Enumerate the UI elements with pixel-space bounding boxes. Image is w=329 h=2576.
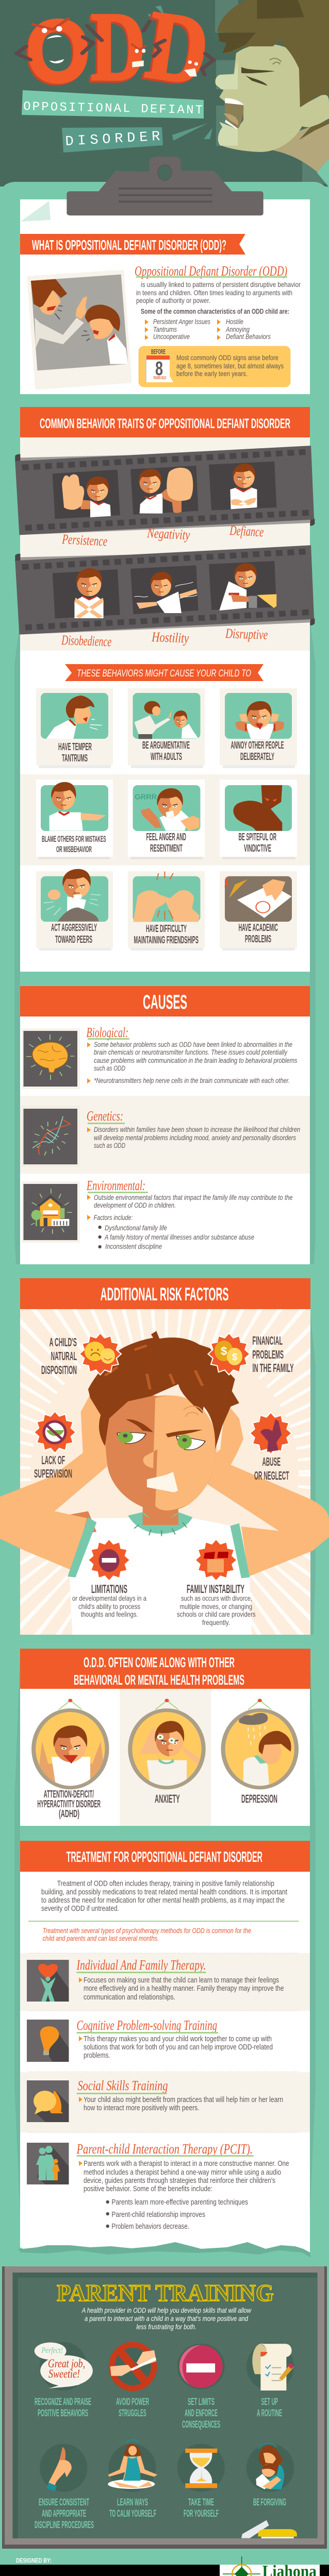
title: ODD letters — [23, 0, 215, 108]
title: ODD letters: O — [23, 3, 90, 104]
therapy: parent-child interaction — [27, 2141, 289, 2231]
scene: disruptive — [219, 563, 276, 611]
cause: environmental: Environmental: — [86, 1178, 145, 1193]
paper: what is ODD — [20, 199, 310, 394]
callout text — [43, 1926, 251, 1942]
risk: limitations: or developmental delays in a — [72, 1594, 146, 1602]
card: blame others: BLAME OTHERS FOR MISTAKES — [42, 834, 106, 844]
cause: environmental: development of ODD in children. — [94, 1201, 176, 1209]
trait labels: Hostility — [151, 629, 189, 646]
tip: power struggles — [109, 2342, 157, 2419]
tip: discipline — [35, 2444, 94, 2531]
panel: parent training chalkboard: DISCIPLINE PROCEDURES — [35, 2520, 94, 2531]
tip: set limits: SET LIMITS — [188, 2397, 215, 2408]
card: anger and resentment: GRRR — [135, 793, 157, 802]
therapy: individual and family — [27, 1957, 284, 2002]
panel: treatment — [20, 1841, 310, 2252]
icon: happy and sad faces — [85, 1342, 115, 1364]
callout text: Treatment with several types of psychotherapy methods for ODD is common for the — [43, 1926, 251, 1935]
characteristics list — [145, 317, 271, 341]
banner: Oppositional Defiant — [22, 90, 204, 118]
intro text: severity of ODD if untreated. — [41, 1904, 119, 1913]
heading: CAUSES — [143, 991, 187, 1013]
trait labels — [61, 522, 268, 649]
portrait: anxiety — [128, 1699, 206, 1791]
characteristics list: Persistent Anger Issues — [153, 317, 210, 326]
icon: DNA — [22, 1106, 80, 1167]
risk: limitations: thoughts and feelings. — [81, 1610, 138, 1618]
intro text — [41, 1879, 288, 1913]
risk: family instability: such as occurs with divorce, — [181, 1594, 252, 1602]
card: anger and resentment — [128, 779, 205, 859]
icon: calendar: YEARS OLD — [153, 376, 166, 380]
card: anger and resentment: FEEL ANGER AND — [146, 832, 186, 843]
heading — [20, 1649, 310, 1689]
icon: mother hugging child — [246, 2444, 294, 2492]
card: friendships — [128, 871, 205, 951]
banner: Disorder: DISORDER — [65, 129, 160, 150]
card: aggressive: ACT AGGRESSIVELY — [51, 922, 97, 934]
tip: set limits: AND ENFORCE — [185, 2408, 218, 2419]
definition text — [136, 280, 301, 315]
trait labels: Negativity — [146, 525, 190, 543]
intro text: Treatment of ODD often includes therapy, training in positive family relationship — [57, 1879, 274, 1888]
callout: before age 8: age 8, sometimes later, but almost always — [176, 362, 284, 370]
tip: discipline: AND APPROPRIATE — [42, 2509, 86, 2519]
therapy: social skills — [27, 2078, 283, 2122]
therapy: parent-child interaction: Parents learn more-effective parenting techniques — [111, 2198, 248, 2207]
icon: no tug of war — [109, 2342, 157, 2391]
trait labels: Disobedience — [61, 632, 112, 649]
icon: stop sign — [177, 2344, 225, 2389]
cause: environmental: A family history of mental illnesses and/or substance abuse — [104, 1233, 254, 1241]
risk: limitations: child's ability to process — [78, 1602, 140, 1611]
heading — [20, 407, 310, 437]
scene: defiance — [230, 464, 257, 509]
card: temper tantrums — [36, 688, 113, 768]
card: argumentative: BE ARGUMENTATIVE — [142, 740, 190, 751]
icon: speech bubbles: Great job, — [48, 2357, 85, 2370]
heading — [20, 986, 310, 1016]
scene: disobedience — [74, 568, 104, 618]
tip: routine — [246, 2343, 294, 2419]
icon: hourglass — [177, 2444, 225, 2492]
icon: house — [22, 1181, 80, 1243]
tip: praise — [35, 2342, 93, 2419]
card: aggressive — [36, 869, 113, 951]
therapy: parent-child interaction: method includes a therapist behind a one-way mirror while using a audio — [84, 2168, 281, 2177]
characteristics list: Hostile — [226, 317, 243, 326]
definition text: in teens and children. Often times leading to arguments with — [136, 289, 292, 297]
risk: limitations: LIMITATIONS — [91, 1582, 127, 1596]
cause: genetics: such as ODD — [94, 1141, 125, 1149]
therapy: cognitive problem-solving: This therapy makes you and your child work together to come up with — [84, 2035, 272, 2043]
risk: financial problems: PROBLEMS — [252, 1348, 284, 1361]
characteristics list: Uncooperative — [153, 332, 190, 341]
icon: no entry — [99, 1549, 120, 1572]
trait labels: Disruptive — [225, 625, 268, 642]
intro text: less frustrating for both. — [136, 2323, 196, 2331]
tip: set limits — [177, 2344, 225, 2430]
risk: natural disposition — [41, 1332, 122, 1377]
card: academic problems: HAVE ACADEMIC — [238, 922, 278, 934]
icon: pointing finger — [40, 2444, 87, 2492]
tip: take time: TAKE TIME — [188, 2497, 214, 2508]
cause: environmental: Dysfunctional family life — [105, 1224, 167, 1232]
label: ADHD: ATTENTION-DEFICIT/ — [44, 1789, 94, 1800]
panel: causes — [20, 986, 310, 1264]
margin shadows — [14, 618, 316, 2215]
icon: calendar: 8 — [155, 358, 163, 380]
risk: family instability: frequently. — [202, 1618, 230, 1626]
label: ADHD — [37, 1789, 101, 1820]
card: temper tantrums: TANTRUMS — [62, 753, 88, 764]
panel: parent training chalkboard: RECOGNIZE AND PRAISE — [35, 2397, 91, 2408]
characteristics list: Tantrums — [153, 325, 177, 333]
risk: abuse or neglect: ABUSE — [262, 1455, 281, 1468]
icon: calendar — [145, 348, 173, 382]
therapy: cognitive problem-solving: Cognitive Problem-solving Training — [76, 2018, 217, 2033]
therapy: parent-child interaction: device, guides parents through strategies that reinforce their children's — [84, 2176, 275, 2185]
label: ADHD: (ADHD) — [59, 1808, 79, 1820]
therapy: parent-child interaction: Parent-child relationship improves — [111, 2210, 205, 2219]
card: spiteful: VINDICTIVE — [244, 843, 271, 854]
tip: discipline: ENSURE CONSISTENT — [39, 2497, 89, 2508]
therapy: cognitive problem-solving — [27, 2018, 273, 2062]
risk: family instability: FAMILY INSTABILITY — [187, 1582, 244, 1596]
ODD faces and limbs — [17, 18, 213, 76]
callout: before age 8: Most commonly ODD signs arise before — [176, 353, 278, 362]
risk: family instability — [177, 1540, 256, 1626]
ribbon heading — [65, 664, 264, 681]
cause: biological: such as ODD — [94, 1064, 125, 1072]
card: friendships: HAVE DIFFICULTY — [146, 923, 187, 935]
risk: family instability: schools or child care providers — [177, 1610, 256, 1618]
panel: additional risk factors — [0, 1278, 329, 1635]
card: academic problems — [220, 871, 297, 951]
icon: speech bubbles: Sweetie! — [48, 2367, 80, 2380]
icon: broken house — [204, 1552, 228, 1572]
icon: speech bubbles: Perfect! — [41, 2346, 63, 2355]
scene: negativity — [139, 468, 193, 514]
scene: hostility — [134, 572, 197, 613]
tip: be forgiving — [246, 2444, 294, 2508]
risk: lack of supervision: SUPERVISION — [34, 1467, 72, 1480]
card: annoy others — [220, 688, 297, 768]
icon: coins: $ — [232, 1352, 237, 1362]
therapy: social skills: how to interact more positively with peers. — [84, 2104, 199, 2112]
tip: routine: SET UP — [261, 2397, 278, 2408]
tip: take time — [177, 2444, 225, 2519]
risk: financial problems: FINANCIAL — [252, 1334, 283, 1347]
risk: natural disposition: NATURAL — [51, 1349, 77, 1363]
tip: power struggles: AVOID POWER — [116, 2397, 149, 2408]
panel: comorbid problems: HYPERACTIVITY DISORDER — [37, 1799, 101, 1810]
trait labels: Defiance — [229, 522, 264, 539]
illustration: boy covering ears — [0, 1331, 329, 1635]
tip: power struggles: STRUGGLES — [119, 2408, 146, 2419]
risk: abuse or neglect — [249, 1412, 292, 1482]
card: argumentative: WITH ADULTS — [151, 751, 182, 762]
cause: genetics: Genetics: — [87, 1108, 123, 1124]
tip: set limits: CONSEQUENCES — [182, 2419, 220, 2430]
portrait: depression — [221, 1699, 299, 1791]
risk: financial problems — [207, 1332, 294, 1376]
icon: meditating woman — [108, 2439, 157, 2492]
clipboard board — [0, 182, 329, 247]
icon: heart and person — [27, 1960, 69, 2002]
risk: lack of supervision — [33, 1411, 77, 1480]
panel: comorbid problems: DEPRESSION — [241, 1792, 277, 1805]
risk: limitations — [72, 1540, 146, 1618]
callout: before age 8: before the early teen years. — [176, 369, 248, 378]
card: academic problems: PROBLEMS — [245, 934, 271, 945]
therapy: parent-child interaction: Problem behaviors decrease. — [111, 2222, 189, 2231]
characteristics list: Annoying — [225, 325, 250, 333]
icon: crossed eye — [44, 1421, 65, 1443]
icon: coins: $ — [221, 1345, 227, 1358]
callout text: child and parents and can last several months. — [43, 1934, 159, 1942]
icon: light bulb — [27, 2020, 69, 2062]
card: blame others — [36, 779, 113, 859]
tip: routine: A ROUTINE — [257, 2408, 282, 2419]
icon: calendar: BEFORE — [151, 348, 166, 355]
icon: family — [27, 2143, 69, 2184]
therapy: parent-child interaction: Parent-child Interaction Therapy (PCIT). — [76, 2141, 253, 2157]
risk: natural disposition: A CHILD'S — [50, 1335, 77, 1349]
logo: Liahona Academy — [220, 2556, 320, 2576]
film strip 1 — [15, 446, 315, 535]
label: anxiety: ANXIETY — [155, 1792, 180, 1805]
card: blame others: OR MISBEHAVIOR — [56, 844, 92, 854]
intro text: a parent to interact with a child in a way that's more positive and — [85, 2314, 249, 2323]
intro text: A health provider in ODD will help you develop skills that will allow — [81, 2306, 252, 2314]
card: spiteful: BE SPITEFUL OR — [238, 832, 276, 843]
icon: notepad — [246, 2343, 294, 2391]
therapy: cognitive problem-solving: problems. — [84, 2051, 110, 2060]
characteristics list: Defiant Behaviors — [226, 332, 271, 341]
heading — [20, 1278, 310, 1309]
card: friendships: MAINTAINING FRIENDSHIPS — [134, 935, 199, 946]
panel: common behavior traits — [15, 407, 315, 651]
card: aggressive: TOWARD PEERS — [55, 934, 92, 945]
card: temper tantrums: HAVE TEMPER — [58, 741, 92, 753]
panel: parent training chalkboard: TO CALM YOURSELF — [109, 2509, 156, 2519]
cause: biological: Biological: — [87, 1025, 128, 1040]
footer black area — [0, 2565, 329, 2576]
icon: brain — [22, 1028, 80, 1089]
card: annoy others: DELIBERATELY — [240, 751, 274, 762]
risk: family instability: multiple moves, or changing — [180, 1602, 252, 1611]
definition text: people of authority or power. — [136, 296, 210, 304]
therapy: individual and family: Individual And Family Therapy. — [76, 1957, 206, 1973]
risk: natural disposition: DISPOSITION — [41, 1363, 77, 1377]
title: ODD letters: O — [24, 1, 92, 102]
torn paper shadow — [18, 2242, 311, 2258]
therapy: individual and family: Focuses on making sure that the child can learn to manage their feelings — [84, 1976, 279, 1985]
definition text: is usuallly linked to patterns of persistent disruptive behavior — [141, 280, 301, 289]
panel: parent training chalkboard — [2, 2266, 327, 2549]
therapy: cognitive problem-solving: solutions that work for both of you and can help improve ODD-related — [84, 2043, 273, 2052]
tip: take time: FOR YOURSELF — [184, 2509, 219, 2519]
triangles: shout marks — [148, 6, 212, 141]
polaroid: mother scolding child — [27, 269, 132, 390]
cause: genetics — [22, 1106, 300, 1167]
portrait: ADHD — [31, 1699, 109, 1791]
label: designed by: DESIGNED BY: — [16, 2558, 52, 2564]
banner: Oppositional Defiant: OPPOSITIONAL DEFIANT — [23, 100, 203, 117]
cause: environmental: Factors include: — [94, 1213, 133, 1222]
card: anger and resentment: RESENTMENT — [150, 843, 183, 854]
therapy: parent-child interaction: positive behavior. Some of the benefits include: — [84, 2184, 212, 2193]
cause: environmental: Inconsistent discipline — [105, 1242, 162, 1250]
icon: speech bubbles — [35, 2342, 93, 2391]
cause: biological — [22, 1025, 297, 1089]
tip: praise: POSITIVE BEHAVIORS — [38, 2408, 88, 2419]
tip: calm — [108, 2439, 157, 2519]
heading — [20, 1841, 310, 1872]
hero panel — [0, 0, 329, 187]
therapy: social skills: Your child also might benefit from practices that will help him or her learn — [84, 2095, 283, 2104]
illustration: shouting boy — [215, 0, 329, 187]
cause: environmental — [22, 1178, 293, 1250]
ribbon heading — [20, 234, 245, 255]
tip: calm: LEARN WAYS — [117, 2497, 148, 2508]
intro text — [81, 2306, 252, 2331]
title: PARENT TRAINING — [57, 2280, 274, 2307]
scene: persistence — [62, 474, 111, 517]
chalk and eraser — [241, 2520, 297, 2538]
panel: behaviors might cause — [20, 651, 310, 972]
tip: be forgiving: BE FORGIVING — [253, 2497, 286, 2508]
risk: lack of supervision: LACK OF — [41, 1453, 65, 1467]
clipboard clip — [67, 157, 264, 215]
therapy: social skills: Social Skills Training — [77, 2078, 168, 2093]
therapy: individual and family: communication and relationships. — [84, 1993, 175, 2002]
film strip 2 — [15, 545, 315, 635]
card: argumentative — [128, 688, 205, 768]
icon: coins — [215, 1341, 242, 1365]
icon: raised arm silhouette — [260, 1419, 282, 1452]
ribbon heading: THESE BEHAVIORS MIGHT CAUSE YOUR CHILD TO — [77, 668, 251, 679]
card: spiteful — [220, 779, 297, 859]
icon: compass — [223, 2556, 260, 2576]
callout: before age 8 — [139, 346, 290, 387]
trait labels: Persistence — [61, 531, 108, 549]
panel: comorbid problems — [20, 1649, 310, 1826]
icon: speech bubbles — [27, 2080, 69, 2122]
